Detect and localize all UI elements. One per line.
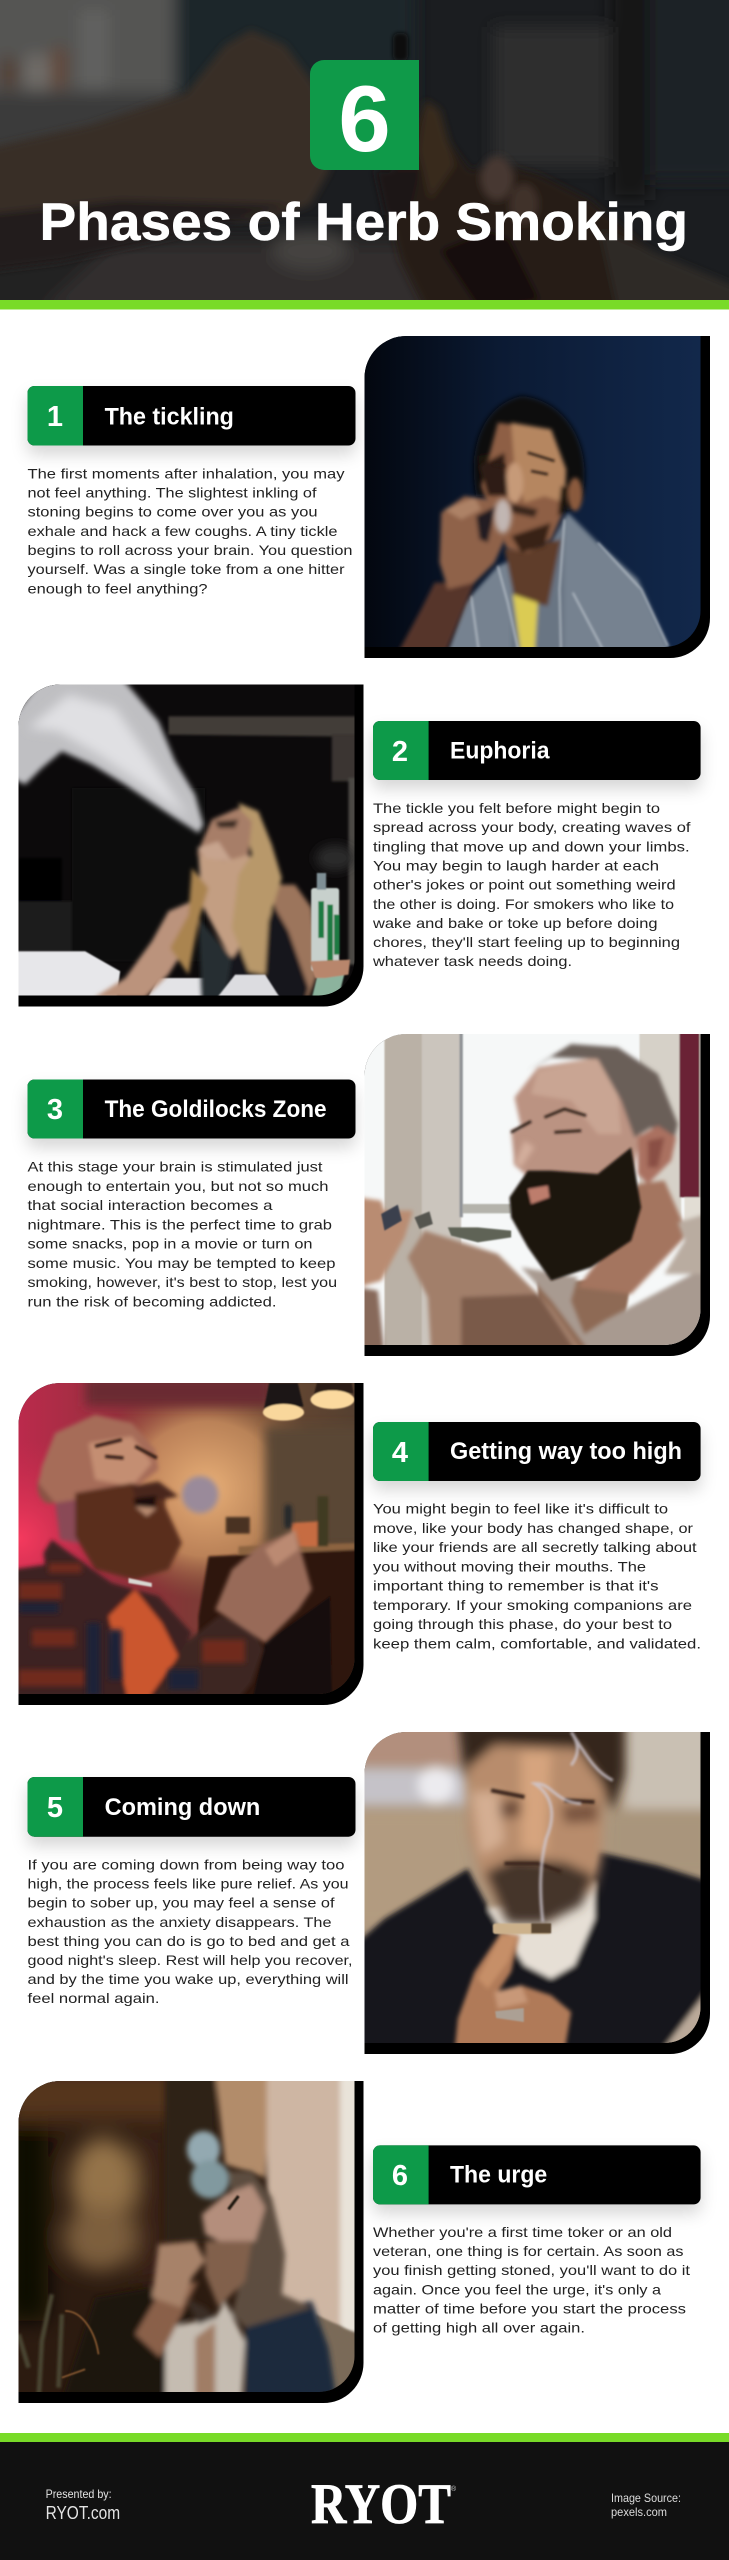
- background details: [80, 1383, 322, 1544]
- body text 1: [28, 465, 352, 596]
- body text 4: keep them calm, comfortable, and validated.: [373, 1635, 701, 1651]
- body text 6: of getting high all over again.: [373, 2320, 585, 2336]
- panel: phase 3: [28, 1031, 713, 1361]
- presented by credit: Presented by:: [46, 2487, 112, 2501]
- head: [511, 1044, 688, 1294]
- body text 3: At this stage your brain is stimulated just: [28, 1159, 323, 1175]
- heading bar 6: [373, 2145, 701, 2204]
- body text 3: [28, 1159, 337, 1310]
- body text 6: [373, 2224, 690, 2336]
- heading bar 5: [28, 1777, 356, 1837]
- RYOT logo: ®: [451, 2485, 457, 2493]
- smoke: [12, 678, 203, 833]
- heading bar 4: Getting way too high: [450, 1438, 682, 1465]
- body text 2: other's jokes or point out something weird: [373, 877, 676, 893]
- body text 6: you finish getting stoned, you'll want to do it: [373, 2262, 690, 2278]
- pipe and lighter: [381, 1205, 511, 1242]
- presented by credit: [46, 2487, 120, 2523]
- body text 1: The first moments after inhalation, you may: [28, 465, 344, 481]
- beard: [509, 1147, 641, 1281]
- body text 4: going through this phase, do your best to: [373, 1616, 672, 1632]
- body text 2: [372, 800, 691, 969]
- figure: [62, 2171, 337, 2401]
- body text 6: again. Once you feel the urge, it's only a: [373, 2281, 661, 2297]
- body text 1: enough to feel anything?: [28, 580, 208, 596]
- body text 3: smoking, however, it's best to stop, lest you: [28, 1274, 337, 1290]
- woman: [93, 803, 320, 1001]
- photo 3: bearded man with pipe: [358, 1031, 713, 1361]
- dark room and blurred foreground: [5, 2068, 178, 2321]
- panel: phase 4: [12, 1376, 701, 1705]
- body text 2: whatever task needs doing.: [372, 953, 572, 969]
- body text 2: You may begin to laugh harder at each: [373, 858, 659, 874]
- heading bar 3: 3: [47, 1094, 63, 1126]
- heading bar 2: Euphoria: [450, 738, 550, 764]
- lime divider bar: [0, 300, 729, 310]
- body text 6: Whether you're a first time toker or an old: [373, 2224, 672, 2240]
- body text 2: spread across your body, creating waves of: [373, 819, 691, 835]
- green number badge: [310, 60, 419, 171]
- body text 4: move, like your body has changed shape, or: [373, 1520, 693, 1536]
- body text 3: some music. You may be tempted to keep: [28, 1255, 336, 1271]
- body text 5: high, the process feels like pure relief. As you: [28, 1876, 348, 1892]
- hair and face: [458, 1722, 624, 1924]
- body text 2: The tickle you felt before might begin to: [373, 800, 660, 816]
- towel: [446, 513, 673, 656]
- hands: [358, 1197, 584, 1354]
- page header: [0, 0, 729, 320]
- image source credit: Image Source:: [611, 2491, 681, 2505]
- body text 5: best thing you can do is go to bed and get a: [28, 1933, 350, 1949]
- footer lime bar: [0, 2433, 729, 2442]
- body text 2: chores, they'll start feeling up to beginning: [373, 934, 680, 950]
- title: Phases of Herb Smoking: [40, 193, 688, 252]
- shirt: [520, 1214, 700, 1345]
- photo 2: woman exhaling smoke with bong: [12, 678, 364, 1008]
- header photo: hands holding a joint: [0, 0, 729, 320]
- chest skin under shirt: [536, 1278, 630, 1345]
- bong and knee: [217, 873, 350, 998]
- hand: [215, 1505, 312, 1643]
- RYOT logo: RYOT: [311, 2473, 451, 2536]
- body text 6: veteran, one thing is for certain. As soon as: [373, 2243, 684, 2259]
- body text 4: You might begin to feel like it's difficult to: [373, 1500, 668, 1516]
- hand and arm: [396, 496, 511, 656]
- pillows and bed: [18, 950, 205, 996]
- body text 5: If you are coming down from being way too: [28, 1856, 345, 1872]
- heading bar 4: [373, 1422, 701, 1481]
- face: [479, 423, 582, 553]
- body text 2: tingling that move up and down your limbs.: [373, 838, 690, 854]
- body text 4: like your friends are all secretly talking about: [373, 1539, 697, 1555]
- footer background: [0, 2442, 729, 2560]
- body text 5: begin to sober up, you may feel a sense of: [28, 1895, 335, 1911]
- image source credit: [611, 2491, 681, 2519]
- heading bar 3: [28, 1080, 356, 1138]
- hand: [454, 1932, 571, 2052]
- body text 1: not feel anything. The slightest inkling of: [28, 484, 317, 500]
- plant: [18, 2294, 62, 2401]
- green number badge: 6: [338, 66, 391, 171]
- body text 3: that social interaction becomes a: [28, 1197, 273, 1213]
- curtain and window: [165, 2074, 367, 2334]
- footer: [0, 2433, 729, 2560]
- heading bar 6: 6: [392, 2160, 408, 2192]
- panel: phase 6: [5, 2068, 701, 2403]
- photo 6: woman exhaling smoke by window: [5, 2068, 367, 2403]
- hair: [474, 396, 585, 510]
- body text 3: some snacks, pop in a movie or turn on: [28, 1236, 312, 1252]
- body text 5: good night's sleep. Rest will help you recover,: [28, 1952, 352, 1968]
- head: [37, 1415, 182, 1580]
- presented by credit: RYOT.com: [46, 2503, 120, 2523]
- smoke: [187, 2131, 229, 2199]
- body text 3: nightmare. This is the perfect time to grab: [28, 1216, 332, 1232]
- photo 5: man holding joint, blurred: [355, 1722, 711, 2054]
- photo 1: man smoking with towel: [364, 336, 710, 658]
- body text 1: begins to roll across your brain. You question: [28, 542, 352, 558]
- sweater and tee: [355, 1852, 711, 2052]
- body text 5: [28, 1856, 352, 2006]
- body text 5: exhaustion as the anxiety disappears. The: [28, 1914, 332, 1930]
- heading bar 3: The Goldilocks Zone: [105, 1096, 327, 1123]
- body text 5: feel normal again.: [28, 1990, 160, 2006]
- body text 1: exhale and hack a few coughs. A tiny tickle: [28, 523, 338, 539]
- body text 2: the other is doing. For smokers who like to: [373, 896, 674, 912]
- panel: phase 1: [28, 336, 710, 658]
- body text 4: temporary. If your smoking companions are: [373, 1597, 692, 1613]
- body text 5: and by the time you wake up, everything will: [28, 1971, 348, 1987]
- body text 1: yourself. Was a single toke from a one hitter: [28, 561, 345, 577]
- photo 4: bearded man in red light: [12, 1376, 365, 1705]
- heading bar 5: 5: [47, 1792, 63, 1824]
- body text 4: important thing to remember is that it's: [373, 1578, 658, 1594]
- heading bar 4: 4: [392, 1437, 408, 1469]
- heading bar 1: [28, 386, 356, 446]
- body text 4: [373, 1500, 701, 1651]
- panel: phase 2: [12, 678, 701, 1008]
- panel: phase 5: [28, 1722, 711, 2054]
- heading bar 1: The tickling: [105, 404, 234, 430]
- heading bar 5: Coming down: [105, 1794, 260, 1821]
- window and frame: [384, 1031, 713, 1357]
- room: [18, 716, 362, 965]
- joint: [493, 1923, 551, 2022]
- body text 3: run the risk of becoming addicted.: [28, 1294, 276, 1310]
- heading bar 1: 1: [47, 401, 63, 433]
- heading bar 6: The urge: [450, 2162, 547, 2189]
- body text 4: you without moving their mouths. The: [373, 1558, 646, 1574]
- image source credit: pexels.com: [611, 2505, 667, 2519]
- background blur: [364, 1732, 700, 1814]
- body text 2: wake and bake or toke up before doing: [372, 915, 658, 931]
- flannel shirt: [12, 1540, 263, 1703]
- body text 6: matter of time before you start the process: [373, 2300, 686, 2316]
- heading bar 2: [373, 721, 701, 780]
- heading bar 2: 2: [392, 736, 408, 768]
- smoke: [534, 1732, 613, 1922]
- body text 1: stoning begins to come over you as you: [28, 504, 318, 520]
- body text 3: enough to entertain you, but not so much: [28, 1178, 328, 1194]
